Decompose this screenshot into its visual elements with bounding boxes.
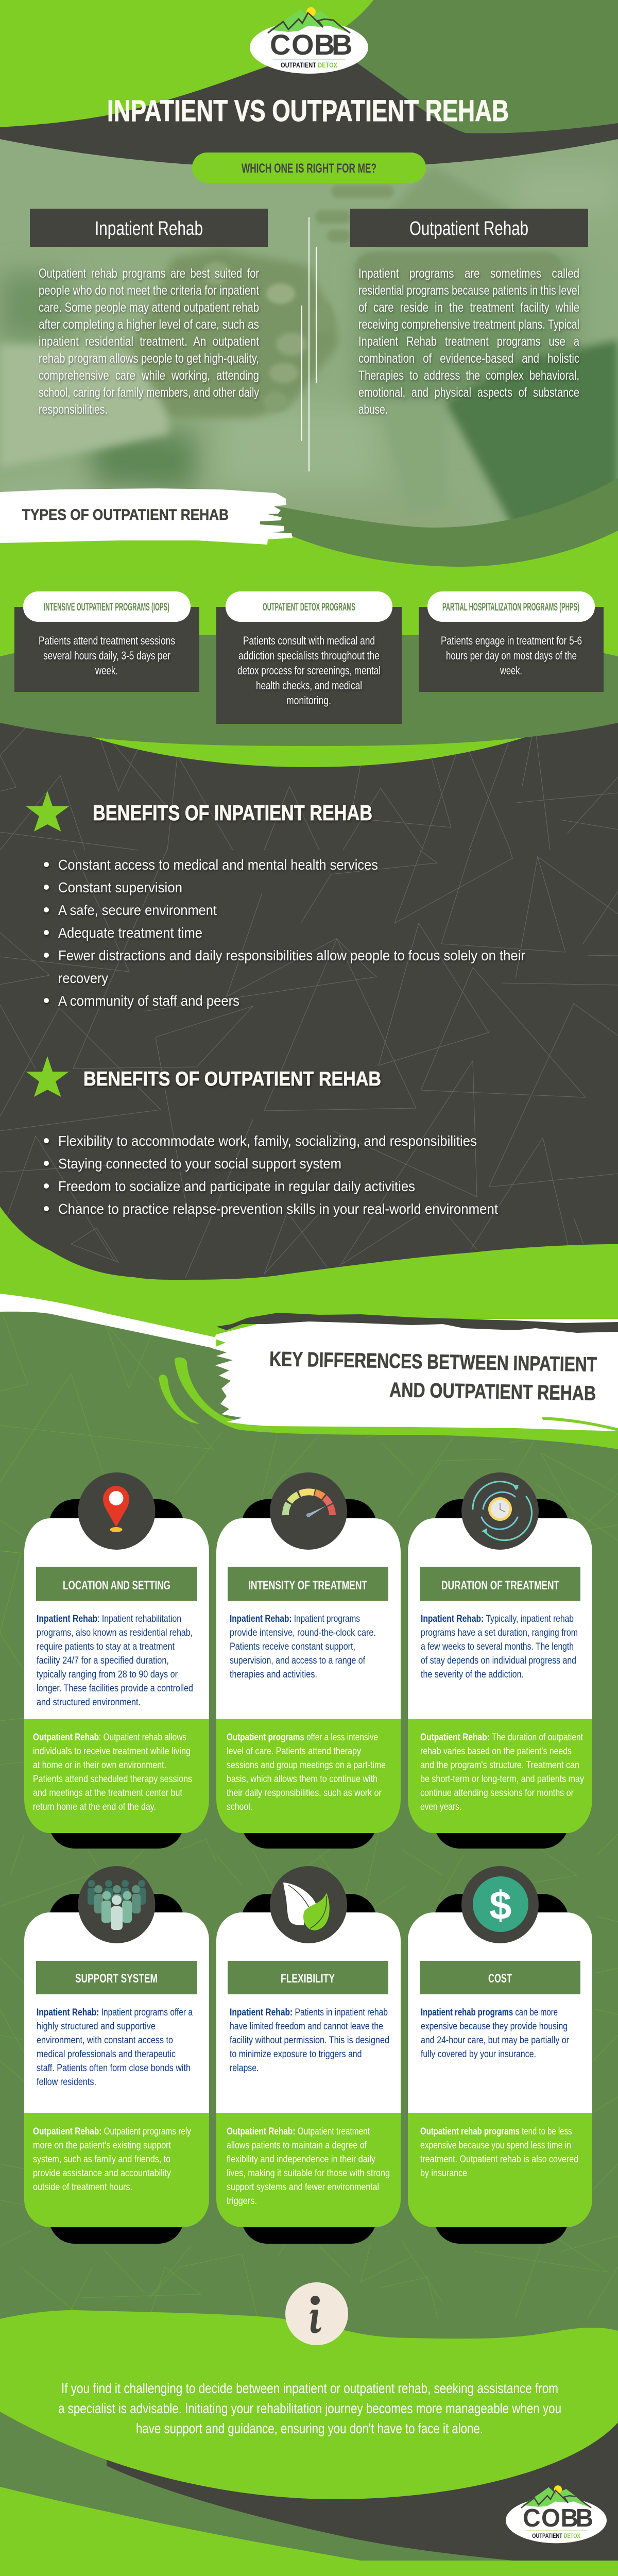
panel: outpatient rehab [350, 209, 588, 417]
card: flexibility: Outpatient Rehab: Outpatient treatment [227, 2126, 370, 2137]
card: flexibility: have limited freedom and cannot leave the [230, 2021, 383, 2032]
card: cost: Inpatient rehab programs can be more [421, 2007, 558, 2018]
card: location and setting: LOCATION AND SETTING [63, 1579, 170, 1592]
panel: outpatient detox programs: detox process for screenings, mental [237, 664, 381, 677]
card: flexibility: relapse. [230, 2063, 259, 2074]
list: inpatient benefits: Fewer distractions and daily responsibilities allow people to focus solely on their [58, 947, 525, 963]
card: location and setting: return home at the end of the day. [33, 1802, 156, 1812]
card: duration of treatment: and the program's structure. Treatment can [420, 1760, 579, 1771]
card: support system: Inpatient Rehab: Inpatient programs offer a [37, 2007, 193, 2018]
background triangle pattern, dark section [0, 727, 618, 1278]
card: cost: fully covered by your insurance. [421, 2049, 536, 2060]
bottom bright green base [0, 2391, 618, 2576]
list: inpatient benefits: Constant access to medical and mental health services [58, 857, 378, 873]
card: support system: system, such as family and friends, to [33, 2154, 170, 2165]
heading: benefits of outpatient rehab: BENEFITS OF OUTPATIENT REHAB [83, 1068, 381, 1090]
subtitle pill [192, 152, 426, 183]
card: intensity of treatment: supervision, and access to a range of [230, 1655, 366, 1666]
card: duration of treatment: of stay depends on individual progress and [421, 1655, 576, 1666]
card: flexibility: facility without permission. This is designed [230, 2035, 389, 2046]
card: location and setting: Patients attend scheduled therapy sessions [33, 1774, 192, 1785]
panel: inpatient rehab: people who do not meet the criteria for inpatient [39, 283, 259, 298]
closing text [58, 2380, 561, 2436]
card: flexibility [216, 1866, 401, 2244]
icon: gauge [285, 1492, 333, 1517]
icon: group of people [88, 1880, 146, 1930]
panel: inpatient rehab: Inpatient Rehab [95, 218, 203, 240]
card: flexibility: lives, making it suitable for those with strong [227, 2168, 390, 2179]
list: outpatient benefits: Staying connected to your social support system [58, 1156, 341, 1172]
card: support system: more on the patient's existing support [33, 2140, 171, 2151]
panel: intensive outpatient programs [14, 591, 199, 692]
card: support system: staff. Patients often form close bonds with [37, 2063, 191, 2074]
card: cost: Outpatient rehab programs tend to be less [420, 2126, 572, 2137]
card: location and setting: programs, also known as residential rehab, [37, 1628, 193, 1638]
list: outpatient benefits [44, 1133, 498, 1217]
list: inpatient benefits: Adequate treatment time [58, 925, 202, 941]
card: intensity of treatment: basis, which allows them to continue with [227, 1774, 377, 1785]
card: support system: provide assistance and accountability [33, 2168, 171, 2179]
panel: inpatient rehab: comprehensive care while working, attending [39, 368, 259, 383]
background triangle pattern, green section [0, 1314, 618, 2318]
panel: intensive outpatient programs: week. [95, 664, 118, 677]
panel: outpatient detox programs [216, 591, 402, 724]
card: cost: expensive because they provide housing [421, 2021, 568, 2032]
icon: star, outpatient benefits [26, 1056, 69, 1097]
icon: clock with arrows [473, 1482, 531, 1540]
card: location and setting: typically ranging from 28 to 90 days or [37, 1669, 178, 1680]
card: support system: SUPPORT SYSTEM [75, 1972, 158, 1986]
subtitle pill: WHICH ONE IS RIGHT FOR ME? [242, 161, 376, 176]
logo: footer: OUTPATIENT DETOX [532, 2532, 580, 2539]
card: flexibility: FLEXIBILITY [281, 1972, 335, 1986]
panel: inpatient rehab: responsibilities. [39, 402, 108, 417]
card: location and setting: facility 24/7 for a specified duration, [37, 1655, 169, 1666]
logo: Cobb Outpatient Detox: COBB [270, 28, 352, 61]
card: intensity of treatment: provide intensive, round-the-clock care. [230, 1628, 376, 1638]
icon: information [285, 2282, 348, 2345]
card: cost: COST [488, 1972, 512, 1986]
panel: inpatient rehab: after completing a higher level of care, such as [39, 317, 259, 332]
bright green wave [0, 531, 618, 670]
card: support system: medical professionals and therapeutic [37, 2049, 176, 2060]
closing text: have support and guidance, ensuring you don't have to face it alone. [136, 2420, 483, 2436]
icon: dollar coin: $ [489, 1883, 511, 1928]
card: duration of treatment: continue attending sessions for months or [420, 1788, 574, 1799]
dark grey header arc [0, 0, 618, 168]
card: location and setting: longer. These facilities provide a controlled [37, 1683, 193, 1694]
card: location and setting: and structured environment. [37, 1697, 141, 1708]
brush heading: types of outpatient rehab: TYPES OF OUTPATIENT REHAB [22, 506, 229, 523]
card: cost [408, 1866, 592, 2244]
panel: intensive outpatient programs: several hours daily, 3-5 days per [43, 649, 170, 662]
card: duration of treatment: Outpatient Rehab: The duration of outpatient [420, 1732, 583, 1743]
card: intensity of treatment: sessions and group meetings on a part-time [227, 1760, 386, 1771]
list: outpatient benefits: Chance to practice relapse-prevention skills in your real-world environment [58, 1201, 498, 1217]
panel: inpatient rehab: rehab program allows people to get high-quality, [39, 351, 259, 366]
bottom dark grey shape [107, 2396, 618, 2561]
card: duration of treatment: programs have a set duration, ranging from [421, 1628, 578, 1638]
card: location and setting: at home or in their own environment. [33, 1760, 166, 1771]
panel: inpatient rehab: school, caring for family members, and other daily [39, 385, 259, 400]
panel: outpatient rehab: Outpatient Rehab [409, 218, 528, 240]
panel: outpatient detox programs: health checks, and medical [256, 679, 362, 692]
card: intensity of treatment: therapies and activities. [230, 1669, 317, 1680]
card: support system: highly structured and supportive [37, 2021, 156, 2032]
card: duration of treatment: Inpatient Rehab: Typically, inpatient rehab [421, 1614, 574, 1624]
panel: partial hospitalization programs: week. [500, 664, 522, 677]
icon: dollar coin [473, 1876, 528, 1932]
bright green swoosh under heading [175, 1358, 618, 1449]
card: duration of treatment: rehab varies based on the patient's needs [420, 1746, 572, 1757]
card: location and setting: require patients to stay at a treatment [37, 1641, 175, 1652]
list: outpatient benefits: Flexibility to accommodate work, family, socializing, and responsibilities [58, 1133, 477, 1149]
card: duration of treatment [408, 1472, 592, 1849]
panel: inpatient rehab: Outpatient rehab programs are best suited for [39, 266, 259, 281]
icon: star, inpatient benefits [26, 791, 69, 832]
list: inpatient benefits: A safe, secure environment [58, 902, 217, 918]
card: intensity of treatment: INTENSITY OF TREATMENT [248, 1579, 367, 1592]
card: cost: treatment. Outpatient rehab is also covered [420, 2154, 578, 2165]
card: location and setting: Outpatient Rehab: Outpatient rehab allows [33, 1732, 186, 1743]
panel: outpatient detox programs: Patients consult with medical and [243, 634, 375, 647]
logo: Cobb Outpatient Detox: OUTPATIENT DETOX [281, 61, 338, 69]
card: duration of treatment: the severity of the addiction. [421, 1669, 524, 1680]
dark green wave [247, 478, 618, 618]
bright green blob [0, 2310, 618, 2499]
card: support system: outside of treatment hours. [33, 2182, 132, 2193]
panel: partial hospitalization programs: hours per day on most days of the [446, 649, 577, 662]
card: flexibility: triggers. [227, 2196, 257, 2207]
bright green corner shape [0, 0, 373, 127]
white brush panel [212, 1319, 618, 1431]
card: duration of treatment: even years. [420, 1802, 461, 1812]
card: location and setting [24, 1472, 209, 1849]
panel: outpatient detox programs: monitoring. [286, 694, 331, 707]
photo background: clasped hands with green tint [0, 129, 618, 556]
list: inpatient benefits: Constant supervision [58, 879, 182, 895]
center divider lines [301, 217, 317, 471]
heading: key differences [269, 1348, 597, 1405]
card: duration of treatment: a few weeks to several months. The length [421, 1641, 574, 1652]
card: intensity of treatment: school. [227, 1802, 252, 1812]
card: support system: environment, with constant access to [37, 2035, 173, 2046]
small swoosh [159, 1375, 200, 1424]
list: outpatient benefits: Freedom to socialize and participate in regular daily activities [58, 1178, 415, 1194]
card: location and setting: and meetings at the treatment center but [33, 1788, 183, 1799]
card: support system: Outpatient Rehab: Outpatient programs rely [33, 2126, 191, 2137]
title: INPATIENT VS OUTPATIENT REHAB [107, 94, 509, 128]
panel: inpatient rehab: inpatient residential treatment. An outpatient [39, 334, 259, 349]
logo: footer [506, 2485, 607, 2543]
small green accent stroke [542, 1417, 618, 1431]
dark green corner shape [309, 0, 618, 133]
logo: Cobb Outpatient Detox [250, 7, 368, 74]
card: location and setting: Inpatient Rehab: Inpatient rehabilitation [37, 1614, 181, 1624]
list: inpatient benefits [44, 857, 525, 1009]
card: flexibility: allows patients to maintain a degree of [227, 2140, 367, 2151]
panel: inpatient rehab [30, 209, 268, 417]
bottom dark green band [0, 2396, 618, 2561]
card: intensity of treatment: Outpatient programs offer a less intensive [227, 1732, 378, 1743]
card: duration of treatment: be short-term or long-term, and patients may [420, 1774, 584, 1785]
dark green hump [0, 635, 618, 746]
dark green differences background [0, 1312, 618, 2380]
icon: leaves [283, 1883, 330, 1930]
card: location and setting: individuals to receive treatment while living [33, 1746, 191, 1757]
panel: outpatient rehab: abuse. [358, 402, 388, 417]
card: intensity of treatment: Patients receive constant support, [230, 1641, 355, 1652]
card: intensity of treatment: their daily responsibilities, such as work or [227, 1788, 382, 1799]
dark grey benefits background [0, 716, 618, 1288]
list: inpatient benefits: A community of staff and peers [58, 993, 239, 1009]
card: intensity of treatment: Inpatient Rehab: Inpatient programs [230, 1614, 360, 1624]
panel: inpatient rehab: care. Some people may attend outpatient rehab [39, 300, 259, 315]
list: inpatient benefits: recovery [58, 970, 108, 986]
dark brush stroke [216, 1313, 618, 1333]
card: cost: and 24-hour care, but may be partially or [421, 2035, 570, 2046]
panel: intensive outpatient programs: Patients attend treatment sessions [39, 634, 175, 647]
icon: location pin [103, 1486, 129, 1532]
card: cost: by insurance [420, 2168, 467, 2179]
panel: intensive outpatient programs: INTENSIVE OUTPATIENT PROGRAMS (IOPS) [44, 601, 169, 613]
card: cost: expensive because you spend less time in [420, 2140, 571, 2151]
card: support system: fellow residents. [37, 2077, 96, 2088]
panel: partial hospitalization programs [419, 591, 604, 692]
card: intensity of treatment [216, 1472, 401, 1849]
card: duration of treatment: DURATION OF TREATMENT [441, 1579, 559, 1592]
brush heading: types of outpatient rehab [0, 488, 293, 545]
panel: partial hospitalization programs: Patients engage in treatment for 5-6 [441, 634, 582, 647]
panel: outpatient detox programs: addiction specialists throughout the [238, 649, 380, 662]
white strip [0, 1294, 216, 1350]
card: flexibility: to minimize exposure to triggers and [230, 2049, 362, 2060]
panel: outpatient detox programs: OUTPATIENT DETOX PROGRAMS [263, 601, 355, 613]
bright green crescent [87, 736, 530, 767]
card: support system [24, 1866, 209, 2244]
logo: footer: COBB [523, 2504, 593, 2532]
card: intensity of treatment: level of care. Patients attend therapy [227, 1746, 361, 1757]
card: flexibility: Inpatient Rehab: Patients in inpatient rehab [230, 2007, 388, 2018]
card: flexibility: flexibility and independence in their daily [227, 2154, 375, 2165]
bright green transition wave [0, 1207, 618, 1453]
heading: benefits of inpatient rehab: BENEFITS OF INPATIENT REHAB [93, 801, 372, 825]
card: flexibility: support systems and fewer environmental [227, 2182, 379, 2193]
